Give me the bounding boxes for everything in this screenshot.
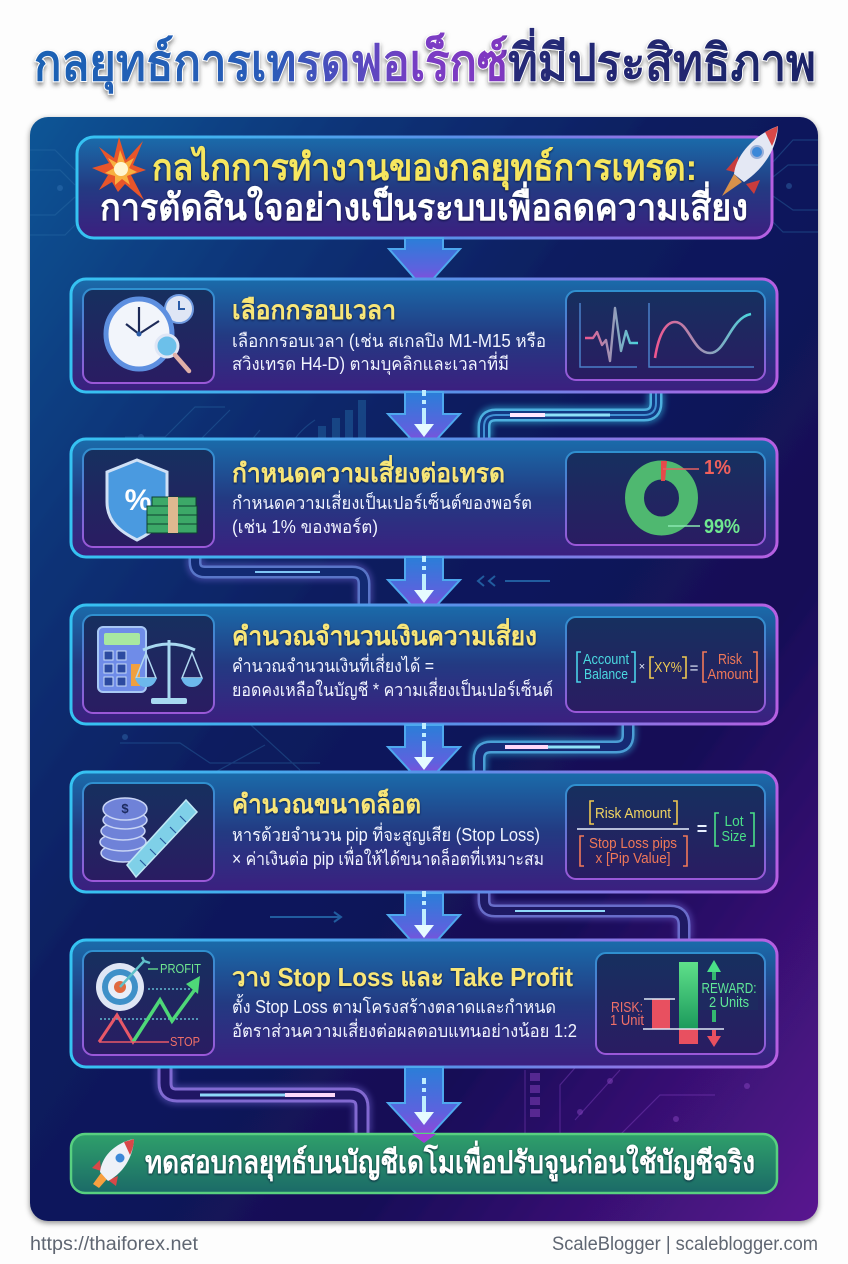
risk reward chart box [596,953,765,1054]
footer right: ScaleBlogger | scaleblogger.com [552,1234,818,1255]
formula box: lot size: Stop Loss pips [589,836,677,852]
formula box: risk amount [566,617,765,712]
step 4 text: หารด้วยจำนวน pip ที่จะสูญเสีย (Stop Loss) [232,822,540,846]
arrow 4 [388,723,460,786]
formula box: lot size: = [697,819,707,839]
dashed arrow left [270,912,341,922]
chart box: timeframes [566,291,765,380]
step 1 text: สวิงเทรด H4-D) ตามบุคลิกและเวลาที่มี [232,351,509,375]
icon: explosion [92,137,146,200]
formula box: risk amount: Amount [708,667,752,683]
step 3 text: คำนวณจำนวนเงินที่เสี่ยงได้ = [232,653,434,676]
panel: step 3 risk amount [71,605,777,724]
formula box: risk amount: Balance [584,667,628,683]
step 5 heading: วาง Stop Loss และ Take Profit [232,962,573,992]
icon box: calculator and scale [83,615,214,713]
risk reward chart box: REWARD: [702,981,756,997]
connector pipe 2 [195,557,364,604]
panel: step 5 stop loss and take profit [71,940,777,1067]
icon box: shield and money: % [125,484,151,517]
step 4 text [232,822,544,869]
arrow 2 [388,390,460,453]
connector pipe 1 [484,392,656,438]
icon box: target and chart: STOP [170,1034,200,1049]
header line 1: กลไกการทำงานของกลยุทธ์การเทรด: [152,145,697,191]
step 4 text: × ค่าเงินต่อ pip เพื่อให้ได้ขนาดล็อตที่เหมาะสม [232,846,544,869]
icon box: shield and money [83,449,214,547]
step 2 text: (เช่น 1% ของพอร์ต) [232,517,378,537]
donut chart box: 1% [704,457,731,479]
step 2 text [232,490,532,537]
icon box: coins and ruler [83,783,214,881]
step 5 text: ตั้ง Stop Loss ตามโครงสร้างตลาดและกำหนด [232,994,556,1017]
formula box: lot size: Lot [724,814,744,830]
dashed flow arrows [478,576,550,586]
risk reward chart box: RISK: [611,1000,643,1016]
risk reward chart box: 1 Unit [610,1013,644,1029]
formula box: risk amount: Account [583,652,629,668]
icon box: target and chart [83,951,214,1055]
step 2 text: กำหนดความเสี่ยงเป็นเปอร์เซ็นต์ของพอร์ต [232,490,532,513]
footer left: https://thaiforex.net [30,1234,199,1255]
donut chart box: 99% [704,516,740,538]
step 1 heading: เลือกกรอบเวลา [232,295,396,325]
step 3 text: ยอดคงเหลือในบัญชี * ความเสี่ยงเป็นเปอร์เซ็นต์ [232,677,553,700]
step 1 text: เลือกกรอบเวลา (เช่น สเกลปิง M1-M15 หรือ [232,331,546,351]
icon: rocket [722,126,778,196]
arrow 3 [388,556,460,619]
formula box: lot size [566,785,765,879]
step 2 heading: กำหนดความเสี่ยงต่อเทรด [232,454,505,488]
formula box: risk amount: XY% [654,660,682,676]
panel: step 4 lot size [71,772,777,892]
formula box: lot size: Size [722,829,746,845]
formula box: risk amount: × [639,661,645,673]
connector pipe 4 [484,893,684,939]
connector pipe 3 [479,725,628,771]
header line 2: การตัดสินใจอย่างเป็นระบบเพื่อลดความเสี่ยง [100,181,748,228]
connector pipe 5 [165,1067,362,1133]
step 5 text [232,994,577,1041]
icon box: clock [83,289,214,383]
risk reward chart box: 2 Units [709,995,749,1011]
icon: rocket small [92,1139,134,1188]
formula box: lot size: x [Pip Value] [596,851,670,867]
panel: call to action [71,1134,777,1193]
donut chart box [566,452,765,545]
icon box: coins and ruler: $ [121,801,129,816]
step 1 text [232,331,546,375]
step 3 heading: คำนวณจำนวนเงินความเสี่ยง [232,617,537,651]
icon box: target and chart: PROFIT [160,961,201,976]
formula box: risk amount: = [690,660,699,677]
step 5 text: อัตราส่วนความเสี่ยงต่อผลตอบแทนอย่างน้อย 1:2 [232,1018,577,1041]
arrow 6 tip [412,1134,436,1143]
panel: step 1 timeframe [71,279,777,392]
arrow 1 [389,238,460,289]
panel: header [77,126,778,238]
formula box: lot size: Risk Amount [595,806,671,822]
panel: step 2 risk per trade [71,439,777,557]
arrow 5 [388,891,460,955]
formula box: risk amount: Risk [718,652,743,668]
step 4 heading: คำนวณขนาดล็อต [232,788,421,819]
arrow 6 [388,1067,460,1142]
step 3 text [232,653,553,700]
